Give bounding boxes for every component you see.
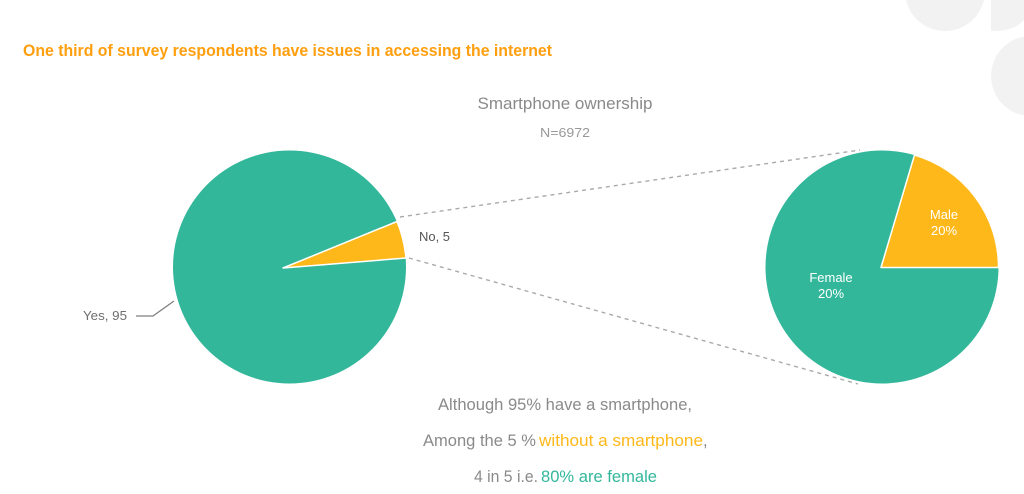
slice: no 5	[283, 222, 406, 268]
pie chart: gender split: 20%	[818, 286, 844, 301]
line 2: ,	[703, 432, 708, 450]
chart heading: Smartphone ownership	[478, 94, 652, 113]
conclusion text	[423, 396, 708, 486]
slice: yes 95	[173, 150, 406, 384]
slice: male	[881, 155, 999, 268]
sample size: N=6972	[540, 125, 590, 140]
line 3: 4 in 5 i.e.	[474, 468, 538, 486]
line 2: Among the 5 %	[423, 432, 536, 450]
pie chart: smartphone ownership	[173, 150, 406, 384]
line 1: Although 95% have a smartphone,	[438, 396, 692, 414]
label: no 5: No, 5	[419, 229, 450, 244]
label: male: Male	[930, 207, 958, 222]
pie chart: gender split: 20%	[931, 223, 957, 238]
label: yes 95	[83, 301, 174, 323]
decorative background circles	[905, 0, 1024, 116]
label: female: Female	[809, 270, 853, 285]
label: yes 95: Yes, 95	[83, 308, 127, 323]
pie chart: gender split	[766, 150, 999, 384]
line 3	[474, 468, 657, 486]
line 3: 80% are female	[541, 468, 657, 486]
slice: female	[766, 150, 998, 384]
connector lines between pies	[400, 150, 860, 384]
line 2	[423, 432, 708, 450]
title: One third of survey respondents have issues in accessing the internet	[23, 41, 552, 60]
line 2: without a smartphone	[538, 432, 703, 450]
